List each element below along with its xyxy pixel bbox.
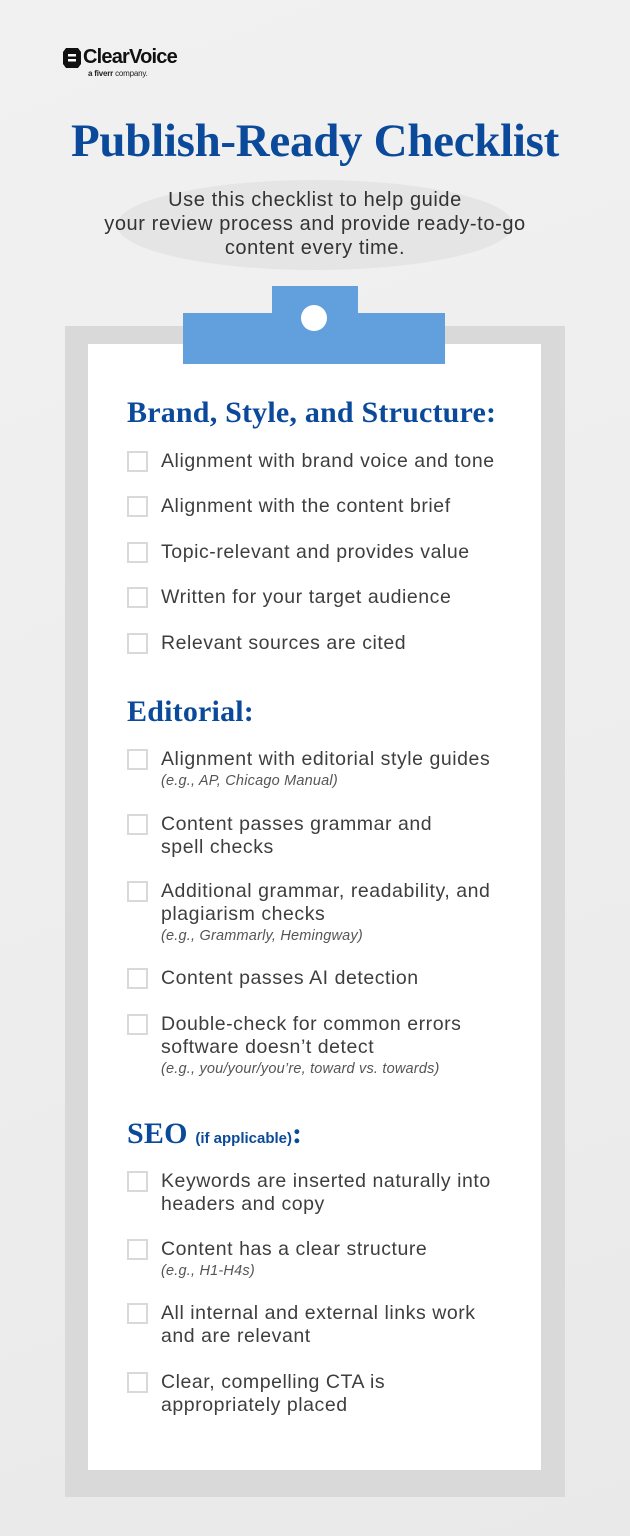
logo: ClearVoice: [83, 46, 177, 68]
subtitle: Use this checklist to help guide: [168, 189, 462, 211]
logo: [63, 46, 178, 78]
text: (e.g., AP, Chicago Manual): [161, 773, 338, 789]
text: headers and copy: [161, 1193, 325, 1215]
text: All internal and external links work: [161, 1302, 476, 1324]
text: (e.g., you/your/you’re, toward vs. towards): [161, 1061, 440, 1077]
subtitle: your review process and provide ready-to-go: [104, 213, 526, 235]
item: [127, 450, 495, 472]
text: Written for your target audience: [161, 586, 451, 608]
subtitle: content every time.: [225, 237, 405, 259]
text: Content passes grammar and: [161, 813, 432, 835]
heading: brand: Brand, Style, and Structure:: [127, 396, 496, 429]
title: Publish-Ready Checklist: [71, 115, 559, 167]
text: Alignment with editorial style guides: [161, 748, 490, 770]
item: [127, 1238, 427, 1279]
clipboard paper: [88, 344, 541, 1470]
item: [127, 1013, 461, 1077]
text: (e.g., H1-H4s): [161, 1263, 255, 1279]
item: [127, 1302, 476, 1347]
heading: editorial: Editorial:: [127, 695, 254, 728]
item: [127, 586, 451, 608]
item: [127, 967, 419, 989]
logo: a fiverr company.: [88, 69, 148, 78]
text: Relevant sources are cited: [161, 632, 406, 654]
text: Additional grammar, readability, and: [161, 880, 490, 902]
item: [127, 748, 490, 789]
text: Keywords are inserted naturally into: [161, 1170, 491, 1192]
text: (e.g., Grammarly, Hemingway): [161, 928, 363, 944]
item: [127, 632, 406, 654]
subtitle: [104, 180, 526, 270]
heading: seo: SEO (if applicable):: [127, 1117, 302, 1150]
text: Clear, compelling CTA is: [161, 1371, 385, 1393]
text: Alignment with the content brief: [161, 495, 451, 517]
item: [127, 1371, 385, 1416]
text: plagiarism checks: [161, 903, 325, 925]
text: spell checks: [161, 836, 274, 858]
text: appropriately placed: [161, 1394, 348, 1416]
icon: logo mark: [63, 48, 81, 68]
text: and are relevant: [161, 1325, 311, 1347]
item: [127, 541, 470, 563]
text: software doesn’t detect: [161, 1036, 374, 1058]
item: [127, 1170, 491, 1215]
item: [127, 880, 490, 944]
text: Double-check for common errors: [161, 1013, 461, 1035]
clipboard board: [65, 326, 565, 1497]
text: Content has a clear structure: [161, 1238, 427, 1260]
item: [127, 813, 432, 858]
item: [127, 495, 451, 517]
text: Topic-relevant and provides value: [161, 541, 470, 563]
text: Content passes AI detection: [161, 967, 419, 989]
text: Alignment with brand voice and tone: [161, 450, 495, 472]
icon: clip: [183, 286, 445, 364]
